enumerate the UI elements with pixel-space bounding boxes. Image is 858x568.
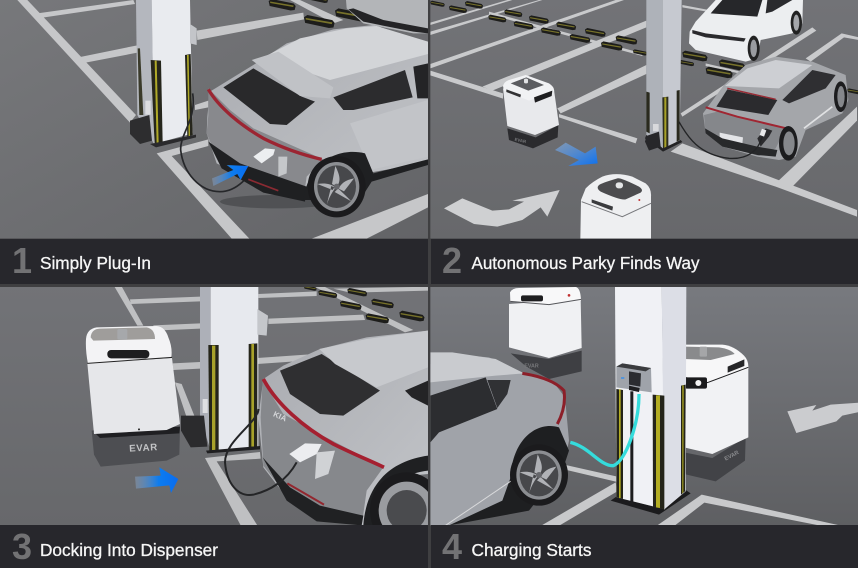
robot logo: EVAR [129, 442, 158, 455]
charger unit [616, 363, 652, 392]
robot logo: EVAR [724, 450, 740, 462]
arrow: plug in [212, 165, 248, 186]
robot: moving parky [503, 75, 559, 148]
caption 3: 3 [12, 526, 32, 567]
robot logo: EVAR [524, 363, 539, 369]
white car [689, 0, 803, 62]
charging cable [180, 93, 244, 192]
caption 1: Simply Plug-In [40, 253, 151, 273]
curb stops [269, 0, 366, 28]
parking lines [115, 287, 428, 525]
caption 3: Docking Into Dispenser [40, 540, 218, 560]
caption 4 [431, 525, 858, 568]
curb stops [430, 1, 858, 94]
robot: foreground parky [580, 174, 651, 239]
car [430, 352, 569, 525]
panel 1: simply plug-in [0, 0, 428, 239]
charging pillar [130, 0, 197, 147]
caption 4: Charging Starts [472, 540, 592, 560]
grey car [703, 57, 848, 161]
robot logo: EVAR [514, 137, 527, 144]
car [256, 330, 428, 525]
floor arrow [444, 190, 560, 227]
charging cable [570, 394, 639, 466]
caption 2 [431, 239, 858, 284]
panel 4: charging starts [429, 284, 858, 525]
charging cable [679, 122, 762, 158]
charging pillar [611, 287, 691, 515]
arrow: docking [135, 467, 178, 493]
caption 2: Autonomous Parky Finds Way [472, 253, 700, 273]
car badge: KIA [272, 410, 288, 424]
caption 2: 2 [442, 240, 462, 281]
curb stops [304, 285, 425, 323]
panel 2: autonomous parky finds way [429, 0, 858, 239]
parking lines [430, 0, 858, 217]
floor arrow [787, 403, 858, 433]
panel 3: docking into dispenser [0, 287, 428, 525]
robot: back parky [509, 287, 582, 379]
car [207, 25, 428, 217]
charging cable [225, 409, 297, 495]
charging pillar [645, 0, 682, 152]
caption 1: 1 [12, 240, 32, 281]
charging pillar [181, 287, 268, 453]
arrow: robot direction [555, 143, 598, 166]
parking lines [17, 0, 428, 239]
caption 3 [0, 525, 428, 568]
caption 4: 4 [442, 526, 462, 567]
robot: docked parky [684, 345, 748, 481]
neighbouring car [346, 0, 428, 33]
caption 1 [0, 239, 428, 284]
parking lines [542, 465, 840, 525]
robot: docking parky [86, 326, 180, 467]
